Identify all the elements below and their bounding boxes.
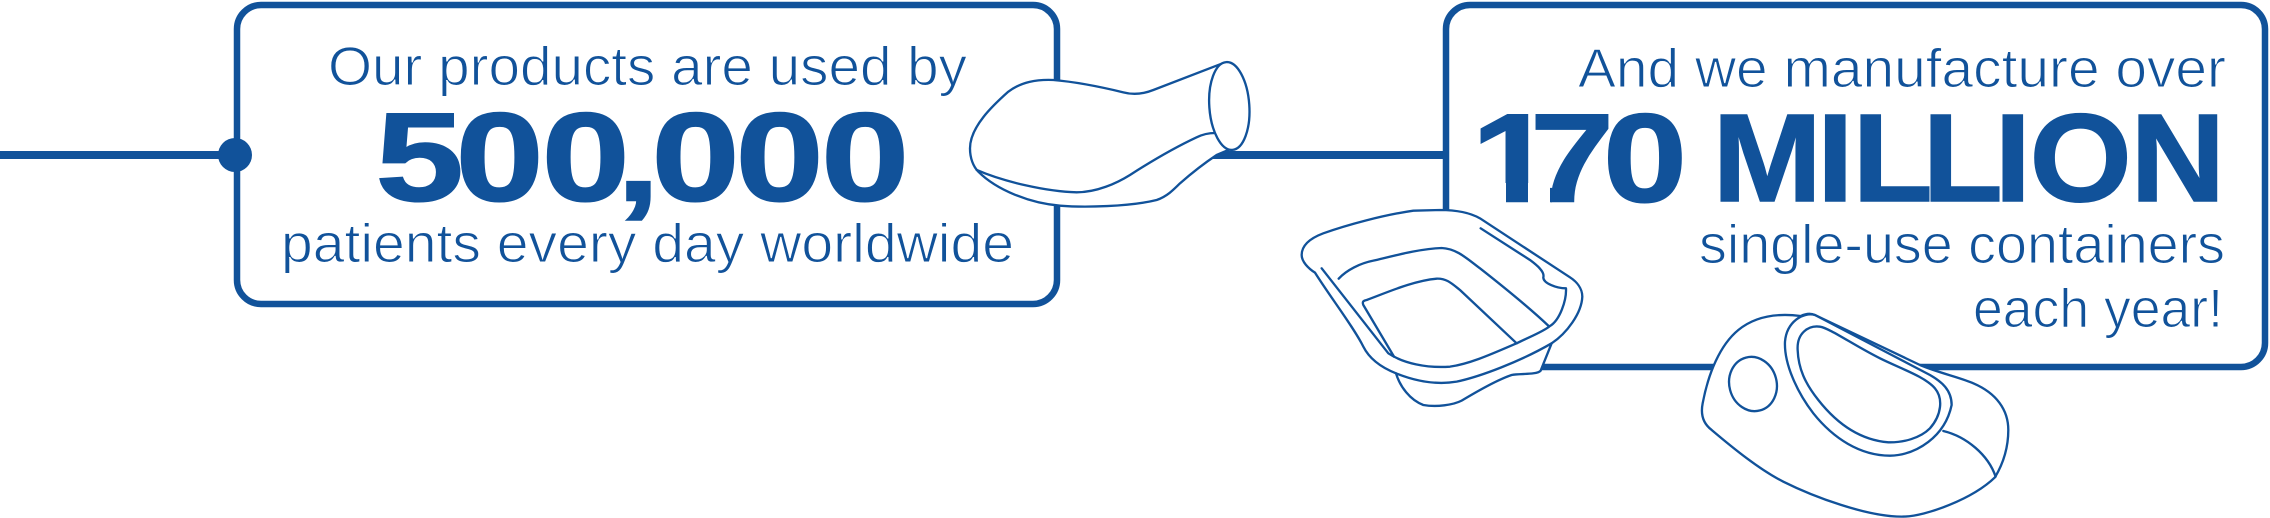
stat: 170 million: 170: [1471, 88, 1687, 229]
connector line: between panels: [1060, 151, 1445, 159]
icon: urinal bottle: [970, 61, 1252, 207]
panel: patients: [237, 5, 1057, 304]
text: each year!: each year!: [1973, 277, 2223, 339]
icon: tray container: [1302, 210, 1582, 406]
stat: 500,000: 500,000: [375, 87, 909, 228]
stat: 170 million: MILLION: [1713, 89, 2225, 228]
text: and we manufacture over: And we manufacture over: [1578, 37, 2226, 99]
panel: containers: [1446, 5, 2265, 367]
connector line: left: [0, 151, 236, 159]
connector dot: [218, 138, 252, 172]
text: patients every day worldwide: patients every day worldwide: [281, 212, 1014, 274]
icon: bedpan container: [1702, 314, 2008, 517]
text: single-use containers: single-use containers: [1699, 213, 2225, 275]
text: our products are used by: Our products are used by: [328, 35, 968, 97]
stat: 170 million: [1470, 88, 2225, 229]
